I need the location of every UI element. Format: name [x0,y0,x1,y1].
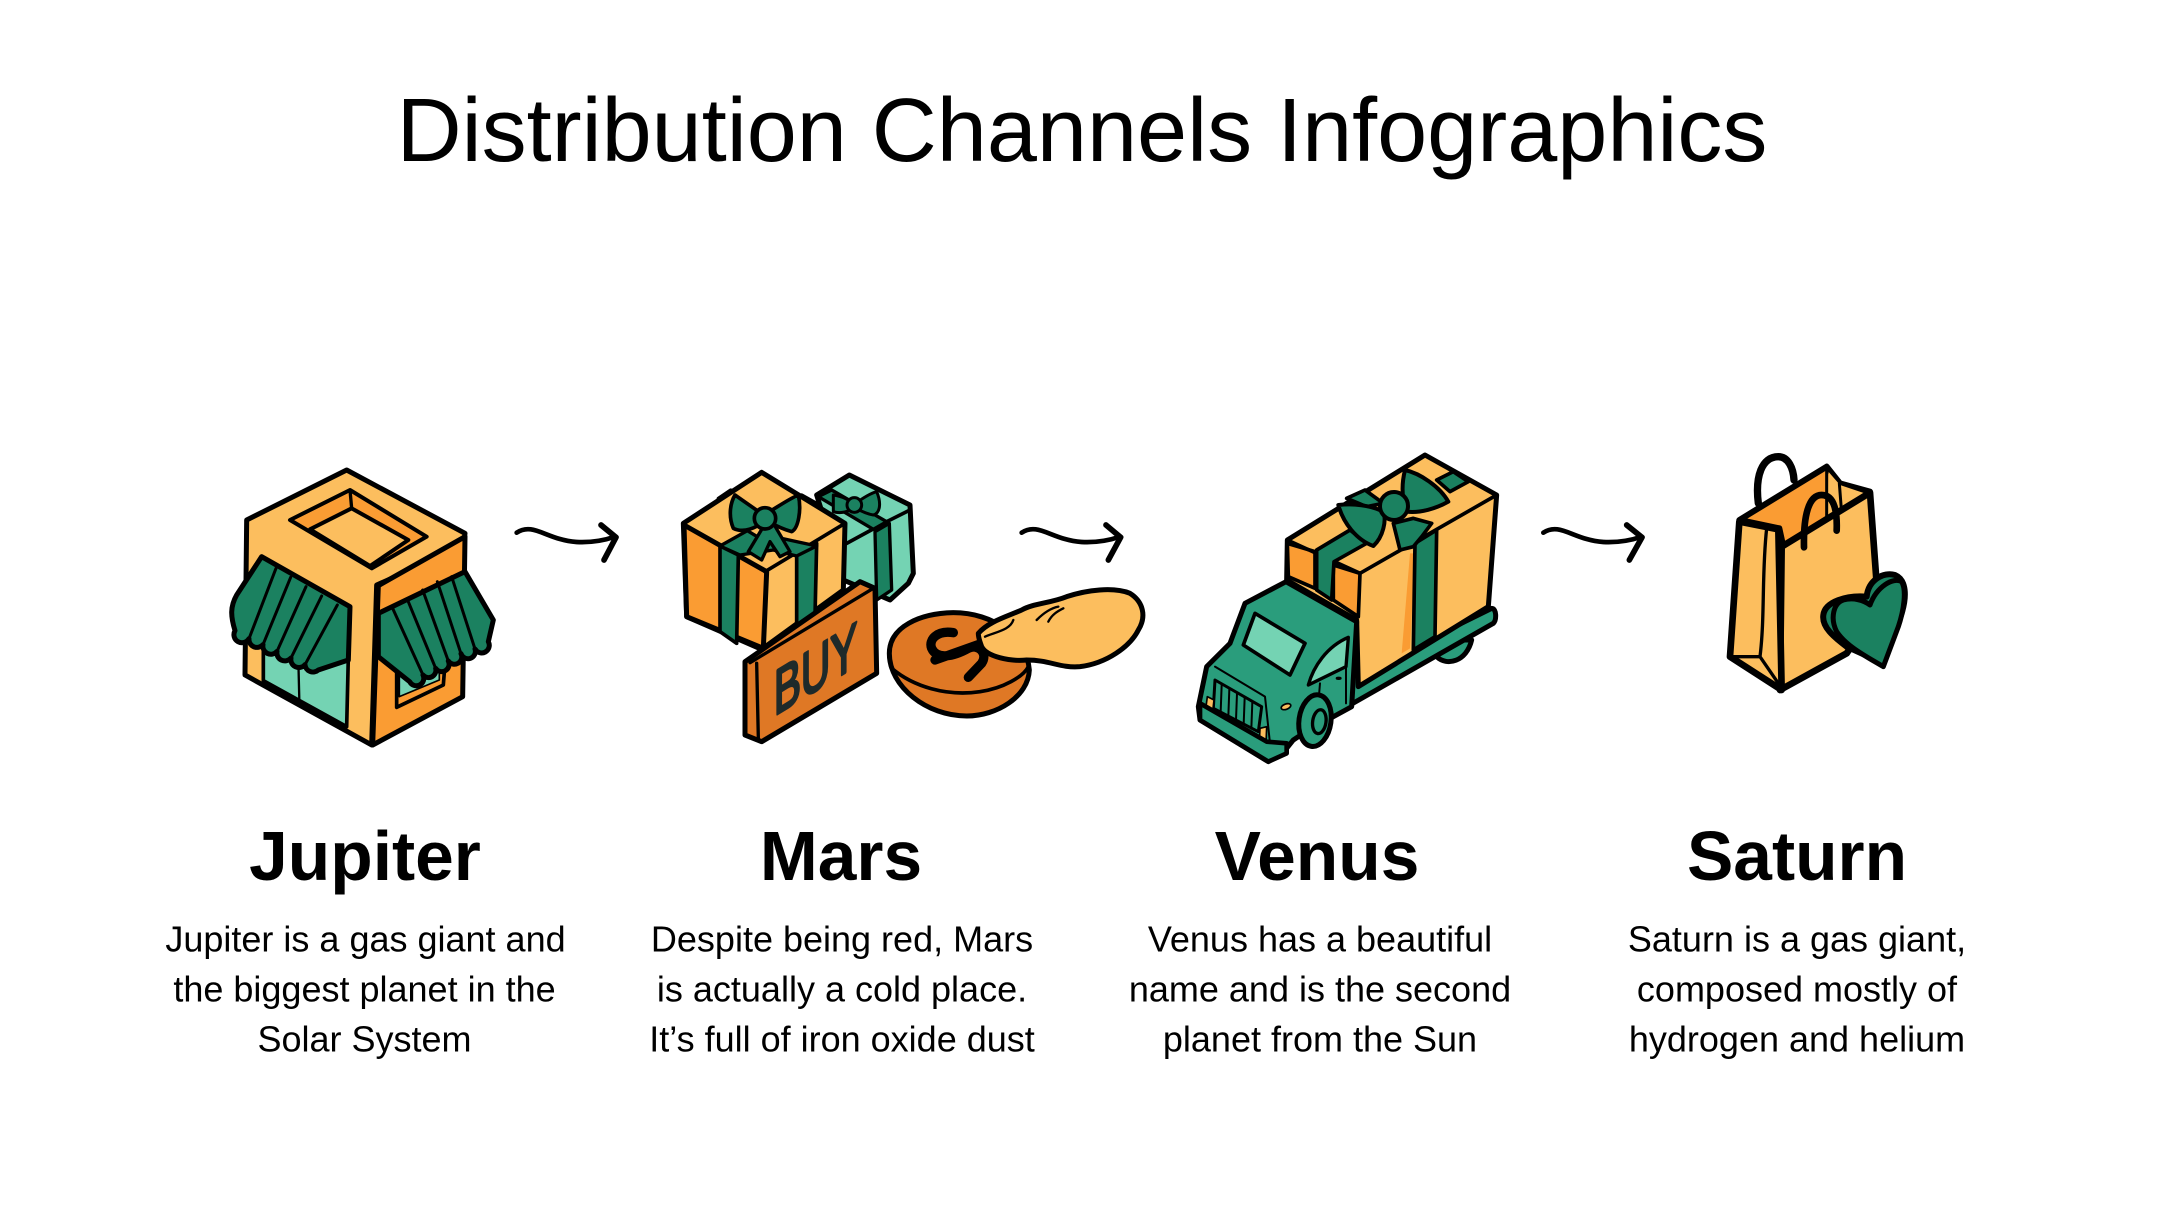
truck cab [1198,582,1357,762]
front handle [1804,495,1837,547]
mint gift box [817,475,913,600]
text: Saturn description: hydrogen and helium [1629,1018,1965,1060]
arrow 2 [1022,525,1121,560]
orange gift box [683,472,845,649]
hand pressing coin [978,590,1143,667]
heading: Saturn: Saturn [1687,817,1907,895]
text: Venus description: planet from the Sun [1163,1018,1477,1060]
bag front [1780,493,1878,690]
heading: Mars: Mars [760,817,922,895]
icon: shopping bag with heart [1730,457,1905,690]
text: Jupiter description: the biggest planet in the [173,968,556,1010]
text: Venus description: Venus has a beautiful [1148,918,1492,960]
text: Mars description: It’s full of iron oxide dust [649,1018,1035,1060]
back handle [1757,457,1794,503]
gift box [1287,455,1497,687]
text: Mars description: Despite being red, Mars [651,918,1033,960]
truck bed [1347,608,1496,705]
arrow 1 [517,525,616,560]
bag side [1730,522,1782,690]
icon: delivery truck with gift [1198,455,1497,762]
arrow 3 [1543,525,1642,560]
heading: Venus: Venus [1215,817,1419,895]
buy sign [745,582,877,742]
text: Mars description: is actually a cold place. [657,968,1027,1010]
heading: Jupiter: Jupiter [249,817,481,895]
title: Distribution Channels Infographics [397,81,1767,181]
icon: store [232,470,493,745]
coin [889,613,1029,716]
text: Jupiter description: Solar System [257,1018,472,1060]
rear wheel [1437,640,1472,662]
heart [1823,574,1905,667]
text: Venus description: name and is the second [1129,968,1511,1010]
text: Jupiter description: Jupiter is a gas giant and [165,918,566,960]
bag interior [1739,467,1870,547]
buy sign: BUY [774,607,857,730]
icon: gifts, buy sign and coin [683,472,1143,742]
text: Saturn description: Saturn is a gas giant, [1628,918,1966,960]
text: Saturn description: composed mostly of [1637,968,1958,1010]
